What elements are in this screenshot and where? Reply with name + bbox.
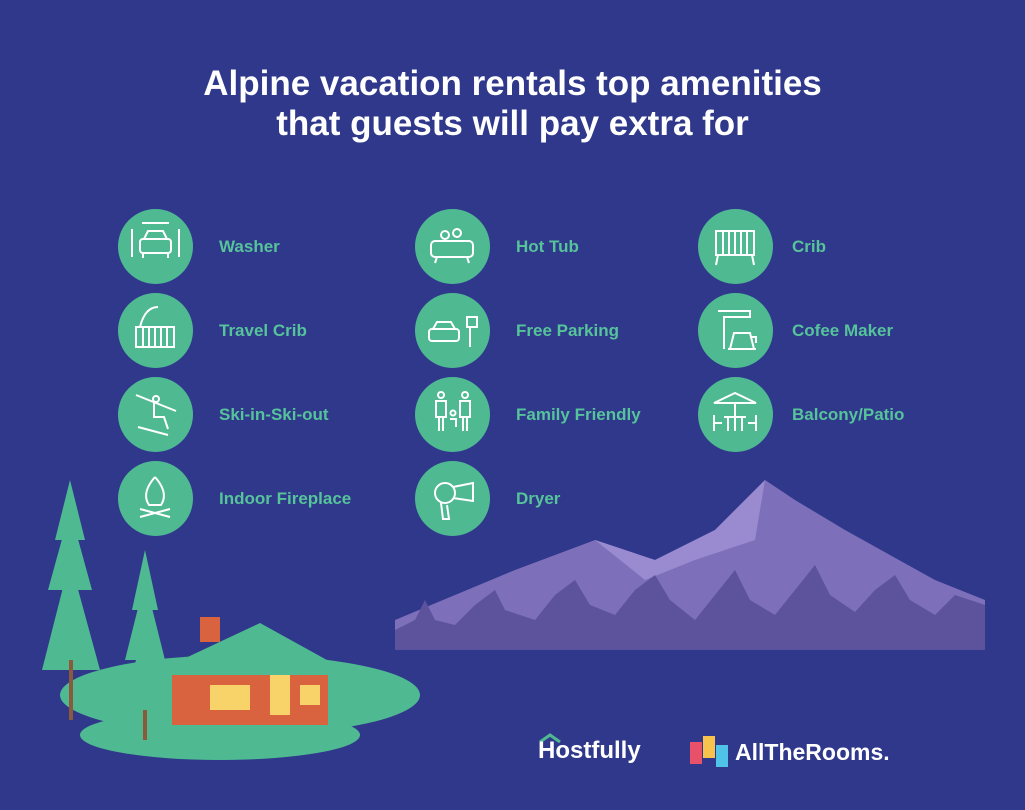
amenity: Indoor Fireplace: Indoor Fireplace bbox=[219, 489, 351, 508]
amenity: Washer bbox=[118, 209, 280, 284]
amenity: Hot Tub: Hot Tub bbox=[516, 237, 579, 256]
amenity: Washer: Washer bbox=[219, 237, 280, 256]
amenity: Crib bbox=[698, 209, 826, 284]
amenity: Balcony/Patio: Balcony/Patio bbox=[792, 405, 904, 424]
scene: house bbox=[172, 617, 328, 725]
amenity: Balcony/Patio bbox=[698, 377, 904, 452]
scene: ground bbox=[60, 656, 420, 760]
amenity: Travel Crib: Travel Crib bbox=[219, 321, 307, 340]
title: Alpine vacation rentals top amenities bbox=[203, 64, 822, 103]
logo: Hostfully: Hostfully bbox=[538, 737, 641, 764]
amenity: Family Friendly: Family Friendly bbox=[516, 405, 641, 424]
amenity: Hot Tub bbox=[415, 209, 579, 284]
scene: mountains bbox=[395, 480, 985, 650]
title: that guests will pay extra for bbox=[276, 104, 749, 143]
scene: trees bbox=[42, 480, 165, 740]
amenity: Cofee Maker: Cofee Maker bbox=[792, 321, 893, 340]
amenity: Dryer: Dryer bbox=[516, 489, 560, 508]
logo: AllTheRooms bbox=[690, 736, 890, 767]
amenity: Dryer bbox=[415, 461, 560, 536]
amenity: Travel Crib bbox=[118, 293, 307, 368]
amenity: Family Friendly bbox=[415, 377, 641, 452]
logo: AllTheRooms: AllTheRooms. bbox=[735, 739, 890, 765]
amenity: Indoor Fireplace bbox=[118, 461, 351, 536]
amenity: Cofee Maker bbox=[698, 293, 893, 368]
amenity: Free Parking: Free Parking bbox=[516, 321, 619, 340]
amenity: Ski-in-Ski-out bbox=[118, 377, 329, 452]
amenity: Crib: Crib bbox=[792, 237, 826, 256]
title bbox=[203, 64, 822, 143]
amenity: Ski-in-Ski-out: Ski-in-Ski-out bbox=[219, 405, 329, 424]
amenity: Free Parking bbox=[415, 293, 619, 368]
